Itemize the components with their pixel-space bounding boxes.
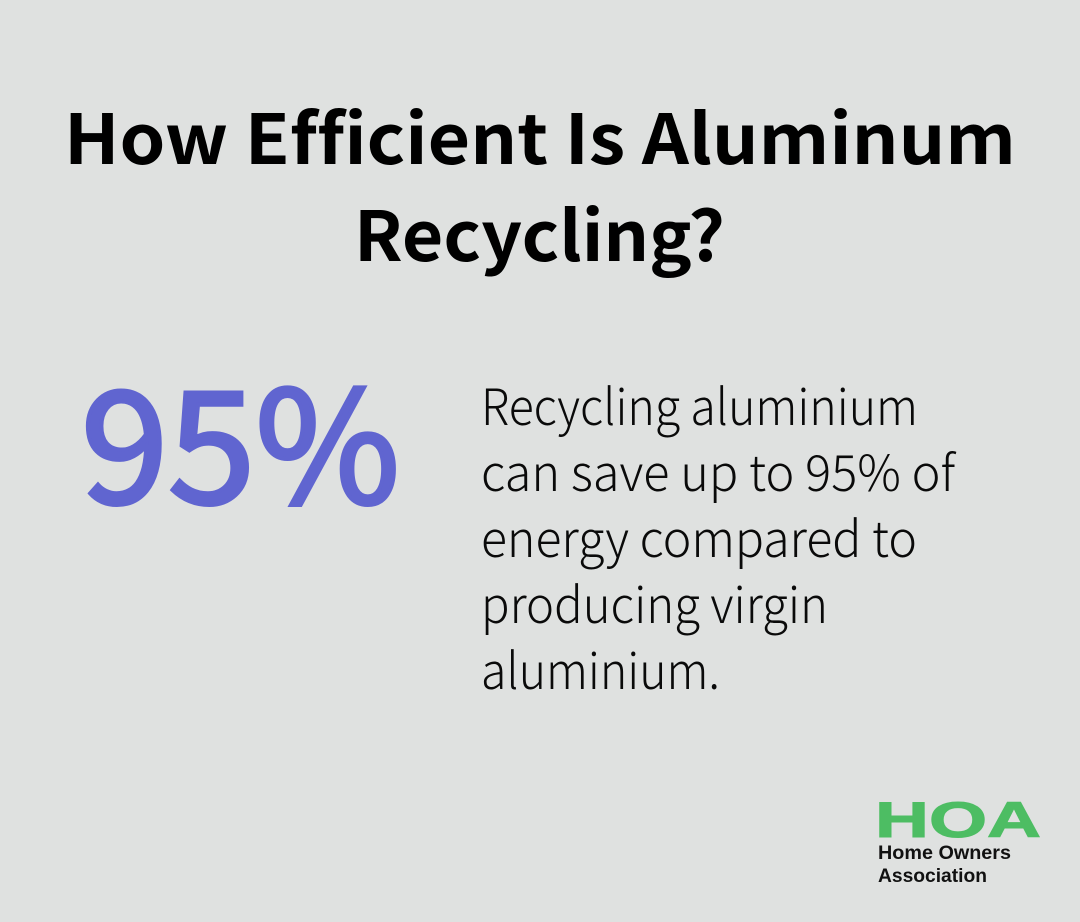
title: How Efficient Is Aluminum	[64, 84, 1016, 184]
logo tagline: Association	[878, 866, 987, 887]
description text: Recycling aluminium	[481, 368, 918, 440]
logo tagline: Home Owners	[878, 843, 1011, 864]
logo tagline	[878, 843, 1011, 887]
title	[64, 84, 1016, 281]
description text: can save up to 95% of	[481, 434, 957, 506]
description text: aluminium.	[481, 632, 720, 704]
description text: producing virgin	[481, 566, 828, 638]
description text: energy compared to	[481, 500, 917, 572]
logo: HOA Home Owners Association	[875, 792, 1041, 887]
title: Recycling?	[354, 181, 725, 281]
statistic: 95%: 95%	[81, 323, 400, 548]
description text	[481, 368, 957, 704]
logo wordmark: HOA	[875, 792, 1041, 848]
